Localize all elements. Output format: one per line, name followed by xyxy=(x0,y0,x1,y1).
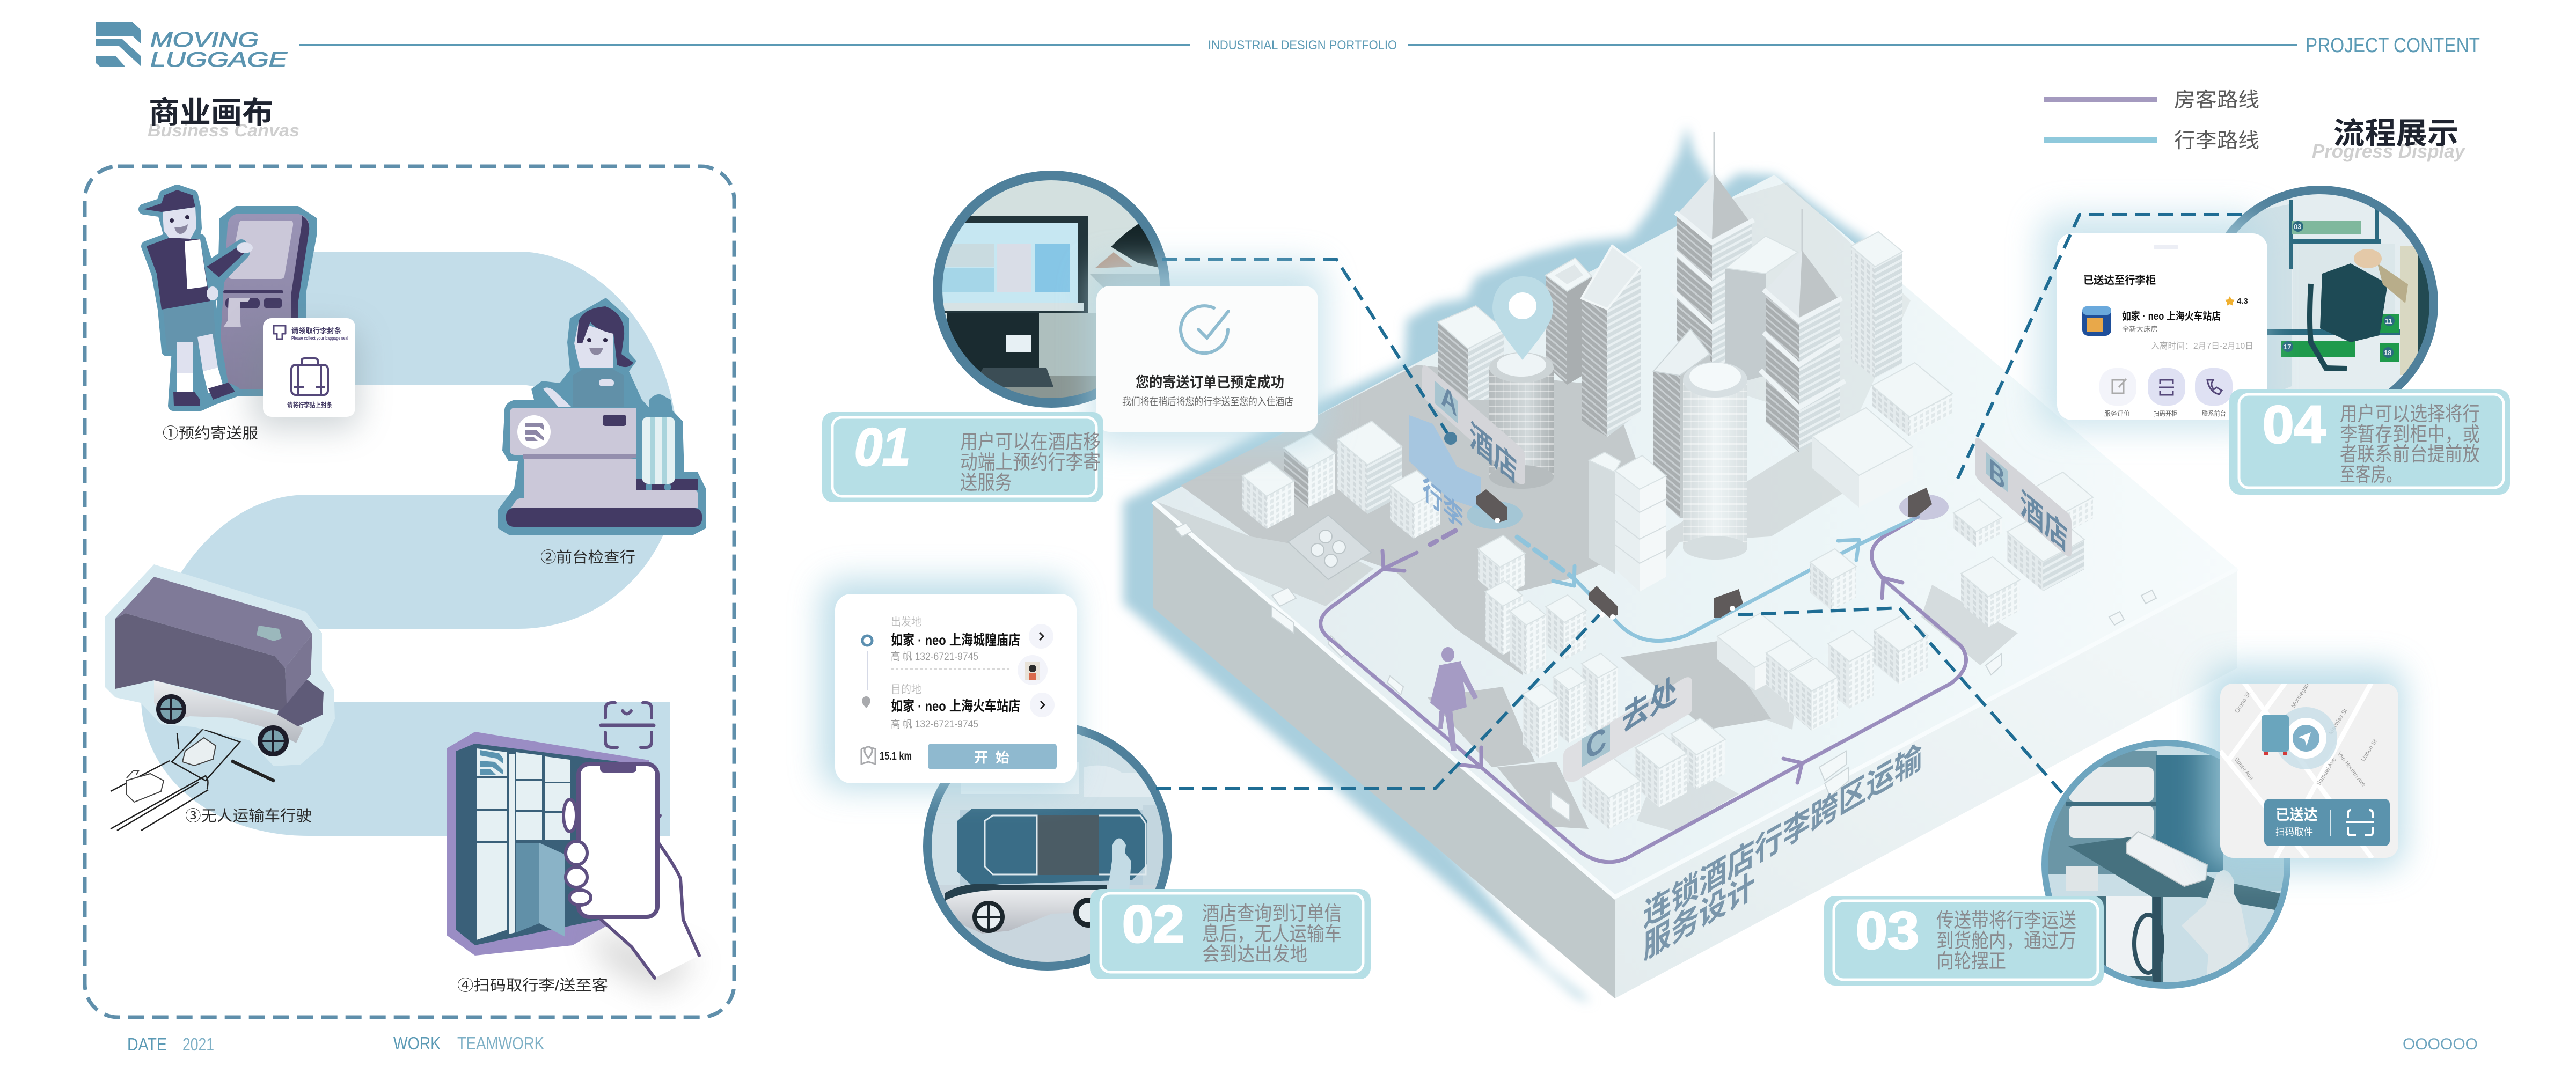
check icon xyxy=(1181,306,1228,353)
kiosk screen xyxy=(229,221,293,279)
backpack xyxy=(2320,263,2388,342)
receipt icon xyxy=(274,326,286,339)
kiosk slots xyxy=(223,290,283,327)
small arrow xyxy=(127,771,138,778)
header label project content: PROJECT CONTENT xyxy=(2306,34,2480,57)
block left side xyxy=(1153,502,1615,998)
face xyxy=(163,207,196,241)
shorts xyxy=(163,301,216,351)
guest figure xyxy=(144,190,253,406)
card: route details: 15.1 km xyxy=(880,750,912,762)
footer work xyxy=(393,1033,544,1053)
legend xyxy=(2044,89,2259,152)
cab xyxy=(277,680,324,726)
locker interior xyxy=(2293,244,2395,329)
locker numbers xyxy=(2282,221,2395,358)
parcel incoming xyxy=(126,774,164,802)
backpack strap xyxy=(2310,284,2347,369)
header bar xyxy=(96,22,2480,71)
wheel rear xyxy=(156,694,186,724)
callout anchor dot xyxy=(1444,432,1457,445)
lower dark bay xyxy=(2045,896,2163,987)
callout: step 01 xyxy=(822,412,1103,502)
building behind cylinder A xyxy=(1438,306,1504,400)
footer date: DATE xyxy=(127,1034,167,1054)
callout: step 02: 息后，无人运输车 xyxy=(1202,923,1342,945)
arrow bubble origin xyxy=(1029,624,1053,649)
arm xyxy=(207,245,244,277)
callout: step 01: 动端上预约行李寄 xyxy=(960,451,1101,473)
callout: step 02 xyxy=(1090,889,1371,979)
footer code: OOOOOO xyxy=(2403,1035,2478,1053)
start button xyxy=(928,744,1057,769)
wheel front xyxy=(258,725,289,756)
buildings xyxy=(1242,132,2093,829)
desk xyxy=(1004,376,1096,398)
destination pin xyxy=(862,696,870,708)
label step 2: ②前台检查行 xyxy=(540,549,635,565)
locker frame xyxy=(456,744,637,945)
route: guest (purple) xyxy=(1321,517,1966,862)
logo wordmark: MOVING xyxy=(150,28,259,52)
figure outline xyxy=(144,190,244,406)
monitor xyxy=(934,216,1088,313)
route arrows blue xyxy=(1553,566,1575,586)
callout: step 04: 李暂存到柜中，或 xyxy=(2340,423,2480,445)
isometric city block xyxy=(1123,126,2237,1002)
locker numbers: 18 xyxy=(2384,349,2391,357)
action: phone xyxy=(2195,368,2233,417)
footer xyxy=(127,1033,2478,1054)
desk sticker outline xyxy=(498,298,706,535)
map labels: Orono St xyxy=(2234,691,2252,715)
driver avatar xyxy=(1018,655,1048,685)
callout: step 03: 03 xyxy=(1856,901,1919,960)
body top xyxy=(115,577,312,668)
scan icon xyxy=(601,703,654,747)
counter front xyxy=(524,459,636,508)
parcel on conveyor xyxy=(182,738,216,766)
map streets xyxy=(2220,681,2372,858)
card: route details: 如家 · neo 上海火车站店 xyxy=(891,698,1020,714)
sign: A hotel xyxy=(1422,365,1525,491)
stub tower xyxy=(1589,452,1621,574)
rating: 4.3 xyxy=(2237,297,2248,306)
seal instruction card xyxy=(263,318,355,417)
water tank plaza xyxy=(1288,515,1371,579)
callout line step 1 xyxy=(1162,259,1451,438)
sign: B hotel: 酒店 xyxy=(2020,484,2068,559)
centre small buildings xyxy=(1478,535,1525,598)
sign: C destination: C xyxy=(1586,719,1607,768)
ghost luggage xyxy=(1409,415,1481,510)
hand shadow xyxy=(588,928,698,993)
illustration: delivery vehicle xyxy=(105,564,335,824)
heading: progress display: Progress Display xyxy=(2312,140,2466,162)
logo on locker xyxy=(480,750,503,775)
receptionist face xyxy=(574,322,613,368)
shirt xyxy=(185,239,207,289)
callout line step 2 xyxy=(1156,615,1599,789)
dark blade tower xyxy=(1653,329,1710,518)
blade tower xyxy=(1582,246,1641,437)
start button: 开 xyxy=(974,749,988,766)
action: review xyxy=(2099,368,2136,417)
block top surface xyxy=(1153,175,2237,897)
seal instruction card: 请将行李贴上封条 xyxy=(287,401,332,409)
callout: step 03: 到货舱内，通过万 xyxy=(1936,930,2076,952)
route: luggage (blue) xyxy=(1517,517,1918,641)
receptionist body xyxy=(573,369,624,407)
kiosk body xyxy=(217,214,309,389)
card: delivered to locker: 入离时间：2月7日-2月10日 xyxy=(2151,341,2253,351)
cylinder A xyxy=(1489,352,1554,489)
step 1 photo xyxy=(933,171,1169,413)
person statue xyxy=(1108,838,1131,891)
suitcase xyxy=(642,394,675,490)
action: phone: 联系前台 xyxy=(2202,409,2226,417)
callout line step 3 xyxy=(1738,608,2063,795)
vehicle mid route xyxy=(1714,589,1743,618)
stacked tower xyxy=(1615,455,1666,592)
footer work: WORK xyxy=(393,1033,441,1053)
locker numbers: 03 xyxy=(2294,223,2301,231)
callout: step 01: 用户可以在酒店移 xyxy=(960,431,1101,453)
footer work: TEAMWORK xyxy=(457,1033,544,1053)
step 3 photo xyxy=(2042,740,2290,987)
skyscraper one xyxy=(1672,132,1758,370)
coat xyxy=(2400,246,2418,375)
right low wide block xyxy=(1812,408,1913,508)
callout: step 04: 04 xyxy=(2263,395,2325,454)
card: route details: 出发地 xyxy=(891,616,921,628)
map labels: Lisbon St xyxy=(2360,738,2379,763)
counter stripe xyxy=(523,454,636,459)
wheels xyxy=(972,898,1091,933)
woman walker xyxy=(1430,647,1478,751)
sign: C destination: 去处 xyxy=(1622,671,1677,739)
person hair xyxy=(1111,224,1158,267)
serpentine path band xyxy=(141,252,679,836)
rating xyxy=(2225,296,2248,306)
cylinder tall xyxy=(1683,362,1747,560)
vehicle on blue route xyxy=(1589,586,1618,620)
locker numbers: 11 xyxy=(2385,317,2392,325)
ground shadows xyxy=(1157,182,2018,832)
seal instruction card: 请领取行李封条 xyxy=(291,327,341,335)
arrow bubble destination xyxy=(1030,693,1055,717)
map labels: Monhegan St xyxy=(2290,676,2314,709)
card glow xyxy=(2206,665,2404,869)
card: delivered to locker xyxy=(2039,215,2267,429)
card: booking confirmed: 您的寄送订单已预定成功 xyxy=(1136,374,1284,391)
mid tower behind xyxy=(1725,236,1798,386)
card: delivered to locker: 已送达至行李柜 xyxy=(2083,274,2156,286)
receptionist hair xyxy=(577,306,633,367)
delivered status tile xyxy=(2264,799,2390,846)
map icon xyxy=(861,747,875,764)
card: route details: 目的地 xyxy=(891,684,921,696)
sign: C destination xyxy=(1563,671,1692,782)
card: booking confirmed xyxy=(1089,263,1326,445)
shelf back xyxy=(2045,751,2157,874)
printer xyxy=(947,313,1039,377)
callout: step 02: 酒店查询到订单信 xyxy=(1202,902,1342,924)
route arrows purple xyxy=(1382,551,1404,571)
card: route details: 高 帆 132-6721-9745 xyxy=(891,651,978,663)
seal instruction card: Please collect your baggage seal xyxy=(291,336,348,341)
locker frames xyxy=(2289,200,2293,269)
desk plinth xyxy=(511,489,698,508)
legend luggage route: 行李路线 xyxy=(2174,130,2259,152)
hand xyxy=(601,805,699,978)
card shadow xyxy=(252,327,360,429)
dark tower behind xyxy=(1546,258,1592,385)
logo wordmark: LUGGAGE xyxy=(150,48,288,71)
delivered status tile: 扫码取件 xyxy=(2275,827,2313,837)
callout line step 4 xyxy=(1955,215,2242,486)
kiosk side xyxy=(291,216,309,327)
small ground props xyxy=(1175,523,2156,821)
locker cells xyxy=(477,748,570,940)
awnings xyxy=(961,762,1079,794)
illustration: conveyor line art xyxy=(111,729,275,831)
sign: B hotel xyxy=(1975,438,2072,559)
chassis xyxy=(946,890,1107,934)
vehicle white body xyxy=(2106,896,2152,976)
sign: B hotel: B xyxy=(1989,452,2005,497)
label step 1: ①预约寄送服 xyxy=(163,425,258,442)
desk base xyxy=(506,508,702,527)
card: route details: 高 帆 132-6721-9745 xyxy=(891,718,978,730)
callout: step 03: 向轮摆正 xyxy=(1936,950,2006,972)
conveyor table xyxy=(2068,837,2287,912)
locker outline xyxy=(447,732,649,956)
open compartment xyxy=(516,843,539,932)
header label portfolio: INDUSTRIAL DESIGN PORTFOLIO xyxy=(1208,38,1397,53)
origin marker xyxy=(862,636,872,645)
heading: business canvas: 商业画布 xyxy=(149,95,273,129)
footer date: 2021 xyxy=(182,1034,214,1054)
card: route details xyxy=(821,579,1077,789)
sign: luggage label: 行李 xyxy=(1422,472,1463,536)
header rule right xyxy=(1408,44,2297,46)
vehicle marker A xyxy=(1467,489,1523,529)
callout: step 03: 传送带将行李运送 xyxy=(1936,909,2076,931)
card glow xyxy=(1089,263,1326,445)
receptionist arm xyxy=(543,387,571,407)
logo mark xyxy=(96,22,141,67)
map labels: Machias St xyxy=(2328,708,2348,736)
footer date xyxy=(127,1034,214,1054)
start button: 始 xyxy=(996,749,1009,766)
jacket xyxy=(147,238,210,310)
block right side xyxy=(1615,569,2237,998)
right centre buildings xyxy=(1810,549,1856,611)
app icon xyxy=(2082,306,2111,336)
callout: step 04: 者联系前台提前放 xyxy=(2340,443,2480,465)
heading: business canvas: Business Canvas xyxy=(148,121,299,140)
body side xyxy=(115,613,287,711)
phone xyxy=(579,764,657,917)
block edge highlight xyxy=(1153,502,2237,897)
luggage icon xyxy=(291,358,328,395)
card: booking confirmed: 我们将在稍后将您的行李送至您的入住酒店 xyxy=(1122,396,1293,408)
chassis deck xyxy=(945,884,1107,901)
block blue halo xyxy=(1123,126,1878,1002)
label step 4: ④扫码取行李/送至客 xyxy=(457,977,608,994)
right mid low block xyxy=(1872,363,1952,437)
callout: step 03 xyxy=(1824,896,2104,986)
map labels: Van Houten Ave xyxy=(2336,751,2367,788)
chassis xyxy=(154,680,303,743)
finger top xyxy=(564,799,576,832)
logo wordmark xyxy=(150,28,288,71)
card glow xyxy=(2039,215,2265,429)
block title: 连锁酒店行李跨区运输 xyxy=(1643,738,1922,935)
illustration: front desk xyxy=(498,298,706,565)
header rule left xyxy=(299,44,1190,46)
scan icon small xyxy=(2346,810,2374,835)
action: scan: 扫码开柜 xyxy=(2154,410,2177,417)
callout: step 04: 至客房。 xyxy=(2340,464,2402,486)
right hotel group xyxy=(2029,472,2093,536)
cap xyxy=(144,190,195,212)
dashed callout lines xyxy=(1156,259,2063,795)
callout: step 01: 01 xyxy=(854,417,910,476)
left group buildings xyxy=(1284,433,1335,508)
counter top xyxy=(510,408,636,457)
callout: step 02: 会到达出发地 xyxy=(1202,943,1307,965)
legend guest route xyxy=(2044,89,2259,112)
location pin xyxy=(1492,276,1553,360)
heading: progress display: 流程展示 xyxy=(2333,116,2458,150)
dashed frame xyxy=(85,166,734,1017)
heading: progress display xyxy=(2312,116,2466,162)
callout: step 01: 送服务 xyxy=(960,472,1012,494)
desk slot xyxy=(603,415,626,426)
illustration: guest at kiosk xyxy=(144,190,360,442)
green label strips xyxy=(2292,221,2361,234)
shelved suitcases xyxy=(2069,767,2154,802)
far right tall tower xyxy=(1851,232,1902,378)
label step 3: ③无人运输车行驶 xyxy=(185,807,312,824)
map labels: Speer Ave xyxy=(2233,756,2255,782)
right panel xyxy=(2223,762,2290,891)
vehicle sticker outline xyxy=(105,564,335,766)
van body xyxy=(957,809,1147,885)
shoes xyxy=(173,392,200,406)
vehicle marker B xyxy=(1899,488,1949,520)
legs xyxy=(177,342,193,373)
connector xyxy=(867,651,868,690)
map labels xyxy=(2233,676,2379,788)
action: review: 服务评价 xyxy=(2104,409,2130,417)
teal wall xyxy=(2156,755,2223,872)
locker numbers: 17 xyxy=(2284,343,2291,351)
body end face xyxy=(285,634,312,704)
step 4 photo xyxy=(2202,186,2442,426)
logo xyxy=(96,22,288,71)
card glow xyxy=(821,579,1073,789)
suitcase on map xyxy=(2262,715,2289,755)
conveyor suitcase xyxy=(2126,832,2207,886)
callout: step 04 xyxy=(2229,389,2510,495)
area right of printer xyxy=(1039,313,1096,376)
desk logo xyxy=(517,415,551,449)
card: delivered to locker: 全新大床房 xyxy=(2122,325,2158,333)
illustration: locker and phone scan xyxy=(447,703,699,994)
map labels: Samuel Ave xyxy=(2315,757,2338,787)
roof panel xyxy=(257,626,282,641)
card: route details: 如家 · neo 上海城隍庙店 xyxy=(891,632,1020,648)
legend luggage route xyxy=(2044,130,2259,152)
locator xyxy=(2275,707,2337,769)
panel: business canvas xyxy=(85,166,734,1017)
delivered status tile: 已送达 xyxy=(2275,807,2318,823)
sign: A hotel: A xyxy=(1441,378,1457,423)
block title: 服务设计 xyxy=(1643,866,1755,967)
sign: A hotel: 酒店 xyxy=(1469,416,1517,491)
legend guest route: 房客路线 xyxy=(2174,89,2259,112)
action: scan xyxy=(2148,368,2185,417)
fingers xyxy=(566,841,591,905)
kiosk sticker outline xyxy=(216,207,316,395)
step 2 photo xyxy=(927,719,1170,971)
callout: step 04: 用户可以选择将行 xyxy=(2340,403,2480,425)
callout: step 02: 02 xyxy=(1122,894,1184,953)
wheel xyxy=(2134,915,2162,973)
card: delivered to locker: 如家 · neo 上海火车站店 xyxy=(2122,310,2221,322)
card: delivered map xyxy=(2206,665,2404,869)
floor xyxy=(939,885,1143,962)
card handle xyxy=(2154,245,2178,249)
heading: business canvas xyxy=(148,95,299,140)
door xyxy=(2238,204,2292,408)
sleeve and hand xyxy=(2377,263,2408,303)
person statue xyxy=(2182,870,2249,987)
skyscraper two xyxy=(1760,209,1845,452)
